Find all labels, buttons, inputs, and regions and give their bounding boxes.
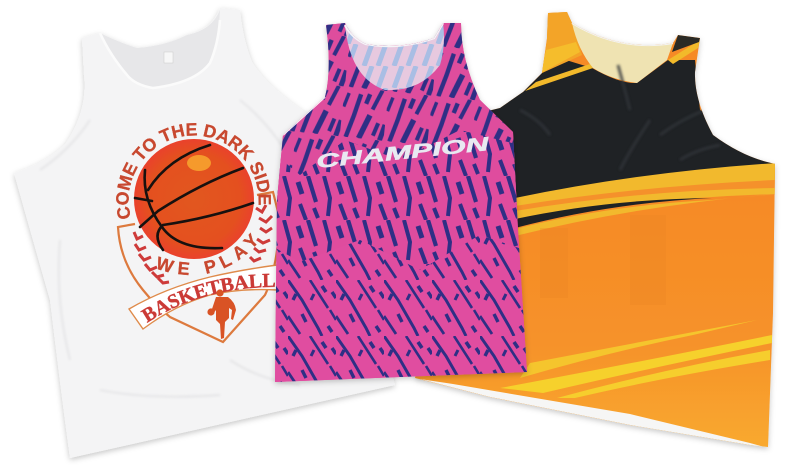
collar — [100, 20, 220, 88]
right laurel — [250, 205, 272, 261]
zebra pattern upper — [276, 23, 517, 210]
white jersey body — [14, 8, 395, 458]
neck tag — [164, 52, 173, 63]
black chest panel — [475, 60, 780, 200]
ribbon banner — [129, 265, 278, 329]
orange jersey base — [415, 12, 775, 447]
yellow thin band — [517, 188, 775, 218]
inner back neck — [100, 10, 220, 88]
basketball — [134, 139, 254, 259]
slogan WE PLAY: WE PLAY — [158, 232, 257, 276]
inner neck — [345, 23, 444, 90]
jersey: pink Champion — [270, 10, 540, 390]
zebra pattern lower — [275, 236, 527, 382]
black panel sheen — [520, 65, 720, 170]
inner neck — [572, 23, 673, 83]
pink jersey shadow — [275, 23, 527, 382]
player silhouette — [207, 289, 236, 339]
yellow chest band — [515, 163, 776, 206]
black streak — [515, 198, 712, 228]
orange stripe band — [766, 163, 775, 195]
collar — [572, 23, 673, 45]
yellow stripe two — [500, 335, 772, 393]
jersey: black and orange — [415, 10, 780, 448]
strap colors right — [668, 40, 700, 64]
fabric folds — [40, 100, 300, 397]
right armhole edge — [283, 97, 325, 135]
strap colors left — [542, 10, 582, 73]
jersey: white COME TO THE DARK SIDE — [12, 8, 397, 462]
yellow stripe one — [520, 320, 757, 378]
yellow stripe three — [557, 350, 770, 398]
logo shield outline — [118, 192, 280, 342]
inner hem white — [420, 379, 768, 448]
lower yellow band — [515, 194, 776, 236]
slogan top arc: COME TO THE DARK SIDE — [116, 123, 272, 219]
collar — [345, 23, 443, 46]
zebra pattern middle — [276, 130, 520, 270]
Champion lettering: CHAMPION — [315, 134, 492, 173]
banner word: BASKETBALL — [140, 274, 275, 323]
faded number block — [540, 228, 548, 230]
left laurel — [134, 232, 169, 283]
